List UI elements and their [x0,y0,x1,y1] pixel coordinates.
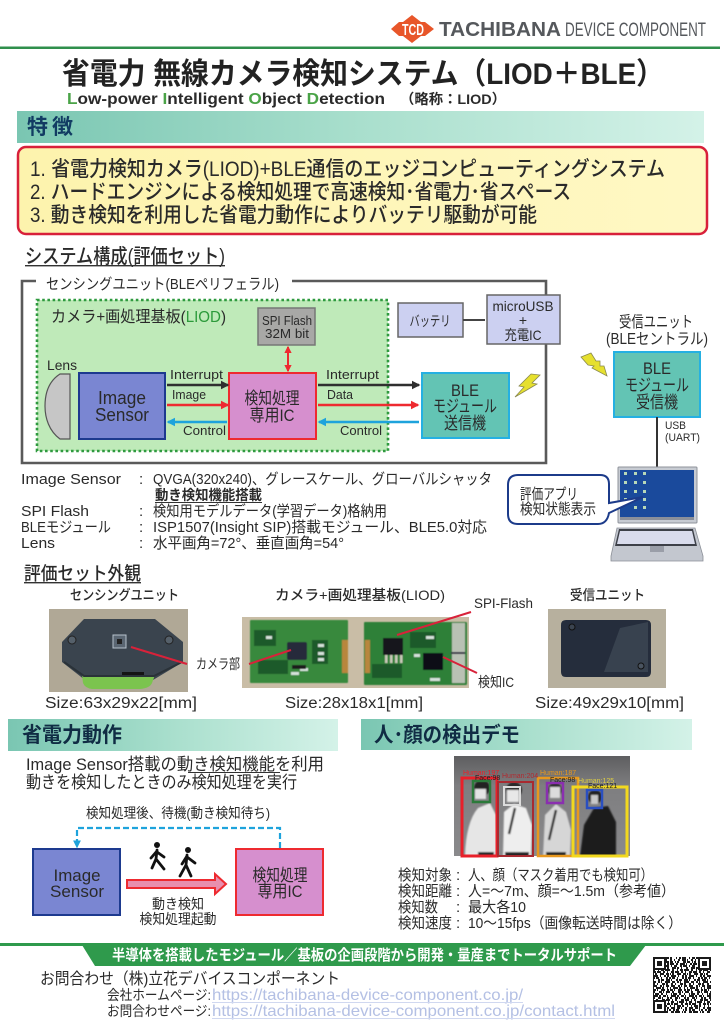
icon: lens: Lens [47,357,77,373]
detection IC block: 検知処理 [244,389,300,408]
QR code [653,958,711,1012]
arrow: motion detection [127,874,226,894]
photo: human and face detection demo: Human:187 [540,770,576,777]
demo spec list: 検知数 [398,899,438,916]
flow label: motion trigger: 動き検知 [152,896,204,912]
microUSB charger block [487,295,560,344]
panel: features list [18,147,707,234]
panel: sensing unit: センシングユニット(BLEペリフェラル) [46,276,279,293]
demo spec list: 検知速度 [398,915,452,932]
subtitle: Low-power Intelligent Object Detection [67,91,385,108]
photo: receiver unit [548,609,666,688]
detection IC block (flow) [236,849,323,915]
section band: detection demo [361,719,692,750]
image sensor block: Image [98,388,146,408]
connector: battery to charger [463,319,485,321]
power saving description [26,755,324,792]
SPI flash block: 32M bit [265,326,309,341]
demo spec list: : [456,867,460,884]
signal labels: Data [327,387,354,402]
flow label: standby: 検知処理後、待機(動き検知待ち) [86,805,270,821]
subtitle: （略称：LIOD） [400,91,506,107]
demo spec list: : [456,883,460,900]
power saving description: Image Sensor搭載の動き検知機能を利用 [26,755,324,774]
pointer: camera part: カメラ部 [196,656,240,672]
image sensor block (flow): Image [54,866,100,885]
size labels [45,695,684,712]
spec list: : [139,503,143,520]
signal labels: Control [183,423,226,438]
icon: lightning transmitter [515,374,540,397]
SPI flash block [258,308,315,345]
spec list: Image Sensor [21,471,121,488]
receiver unit label: (BLEセントラル) [606,331,708,348]
BLE receiver block: 受信機 [636,393,678,412]
size labels: Size:63x29x22[mm] [45,695,197,712]
image sensor block (flow) [33,849,120,915]
receiver unit label: 受信ユニット [619,313,693,331]
photo: sensing unit [49,609,188,692]
contact information: https://tachibana-device-component.co.jp/contact.html [212,1003,615,1020]
arrows: IC to BLE module [318,385,419,422]
detection IC block (flow): 検知処理 [252,866,308,885]
panel: camera and image processing board [37,300,388,451]
SPI flash block: SPI Flash [262,313,312,328]
BLE transmitter block: モジュール [433,397,497,416]
signal labels: Interrupt [326,367,379,382]
icon: walking people [151,842,195,876]
BLE transmitter block [422,373,509,438]
size labels: Size:28x18x1[mm] [285,695,423,712]
icon: TCD diamond logo [391,15,434,43]
contact information [40,969,615,1020]
arrow: SPI bidirectional [287,347,289,371]
demo spec list [398,867,682,932]
BLE receiver block: BLE [643,359,671,378]
pointers: board parts [249,612,477,673]
detection IC block: 専用IC [250,406,294,425]
panel: features list: 3. 動き検知を利用した省電力動作によりバッテリ駆動が可能 [30,204,537,227]
USB connection: (UART) [665,432,700,444]
icon: laptop [611,467,703,561]
contact information: 会社ホームページ: [107,987,211,1003]
callout: evaluation app: 検知状態表示 [520,501,596,518]
signal labels: Interrupt [170,367,223,382]
callout: evaluation app: 評価アプリ [520,486,578,503]
power saving description: 動きを検知したときのみ検知処理を実行 [26,773,297,792]
pointer: camera part [131,647,240,672]
panel: features list: 2. ハードエンジンによる検知処理で高速検知･省電力･省スペース [30,181,571,204]
section band: power saving operation [8,719,338,751]
spec list: : [139,535,143,552]
labels: SPI flash and detection IC [474,595,533,690]
spec list: : [139,471,143,488]
photo: human and face detection demo: Face:98 [475,775,500,782]
icon: TCD diamond logo: TCD [402,22,424,39]
photo: human and face detection demo: Human:197 [463,770,499,777]
title: 省電力 無線カメラ検知システム（LIOD＋BLE） [62,58,664,91]
footer rule [0,943,724,946]
flow label: motion trigger [140,896,216,927]
callout: evaluation app [508,475,643,524]
microUSB charger block: 充電IC [504,327,542,343]
section band: detection demo: 人･顔の検出デモ [374,723,520,747]
size labels: Size:49x29x10[mm] [535,695,684,712]
image sensor block [79,373,165,439]
demo spec list: : [456,915,460,932]
labels: SPI flash and detection IC: SPI-Flash [474,595,533,611]
arrow: dashed feedback [77,828,280,848]
panel: features list: 1. 省電力検知カメラ(LIOD)+BLE通信のエッジコンピューティングシステム [30,158,665,181]
BLE transmitter block: BLE [451,381,479,400]
photo captions: センシングユニット [70,587,179,603]
labels: SPI flash and detection IC: 検知IC [478,674,514,690]
spec list: 動き検知機能搭載 [155,487,262,503]
USB connection [656,417,700,467]
demo spec list: 人、顔（マスク着用でも検知可） [468,867,653,884]
header: company logo [391,15,561,43]
flow label: motion trigger: 検知処理起動 [140,911,216,927]
battery block [398,303,463,337]
BLE receiver block: モジュール [625,376,689,395]
detection IC block (flow): 専用IC [258,882,302,901]
photo: human and face detection demo: Human:204 [502,773,538,780]
section band: features [17,111,704,143]
photo captions [70,587,645,603]
demo spec list: 最大各10 [468,899,526,916]
photo captions: 受信ユニット [570,587,645,603]
photo: human and face detection demo: Face:98 [550,777,575,784]
microUSB charger block: microUSB [492,298,554,314]
receiver unit label [606,313,708,348]
arrows: sensor to IC [167,385,228,422]
spec list: ISP1507(Insight SIP)搭載モジュール、BLE5.0対応 [153,519,487,536]
spec list: Lens [21,535,55,552]
BLE receiver block [614,352,700,417]
header rule [0,46,720,49]
detection IC block [229,373,316,439]
section band: features: 特徴 [27,116,73,139]
heading: evaluation set appearance: 評価セット外観 [24,563,141,584]
signal labels: Control [340,423,382,438]
icon: lens [45,357,77,439]
spec list: 検知用モデルデータ(学習データ)格納用 [153,502,387,520]
photo: camera and processing board [242,617,469,688]
spec list: QVGA(320x240)、グレースケール、グローバルシャッタ [153,471,492,488]
spec list [21,471,492,552]
demo spec list: 人=～7m、顔=～1.5m（参考値） [468,883,675,900]
photo: human and face detection demo: Face:121 [588,783,617,790]
company name: TACHIBANA [439,19,561,41]
USB connection: USB [665,420,686,432]
icon: lightning receiver [581,353,607,376]
demo spec list: 10～15fps（画像転送時間は除く） [468,915,682,932]
footer banner: 半導体を搭載したモジュール／基板の企画段階から開発・量産までトータルサポート [112,946,617,964]
contact information: お問合わせページ: [107,1003,211,1019]
spec list: SPI Flash [21,503,89,520]
spec list: : [139,519,143,536]
signal labels: Image [172,387,206,402]
battery block: バッテリ [410,313,450,329]
image sensor block (flow): Sensor [50,882,104,901]
spec list: BLEモジュール [21,519,111,536]
photo: human and face detection demo [454,756,630,856]
photo: human and face detection demo: Human:125 [578,778,614,785]
panel: sensing unit [22,276,546,463]
image sensor block: Sensor [95,405,149,425]
microUSB charger block: + [519,312,527,328]
contact information: お問合わせ（株)立花デバイスコンポーネント [40,969,340,988]
heading: system configuration: システム構成(評価セット) [25,245,225,268]
BLE transmitter block: 送信機 [444,414,486,433]
contact information: https://tachibana-device-component.co.jp/ [212,987,524,1004]
spec list: 水平画角=72°、垂直画角=54° [153,535,344,552]
panel: camera and image processing board: カメラ+画処理基板(LIOD) [51,308,226,326]
signal labels [170,367,382,438]
demo spec list: : [456,899,460,916]
demo spec list: 検知対象 [398,867,452,884]
demo spec list: 検知距離 [398,883,452,900]
section band: power saving operation: 省電力動作 [22,724,122,747]
photo captions: カメラ+画処理基板(LIOD) [275,587,445,603]
